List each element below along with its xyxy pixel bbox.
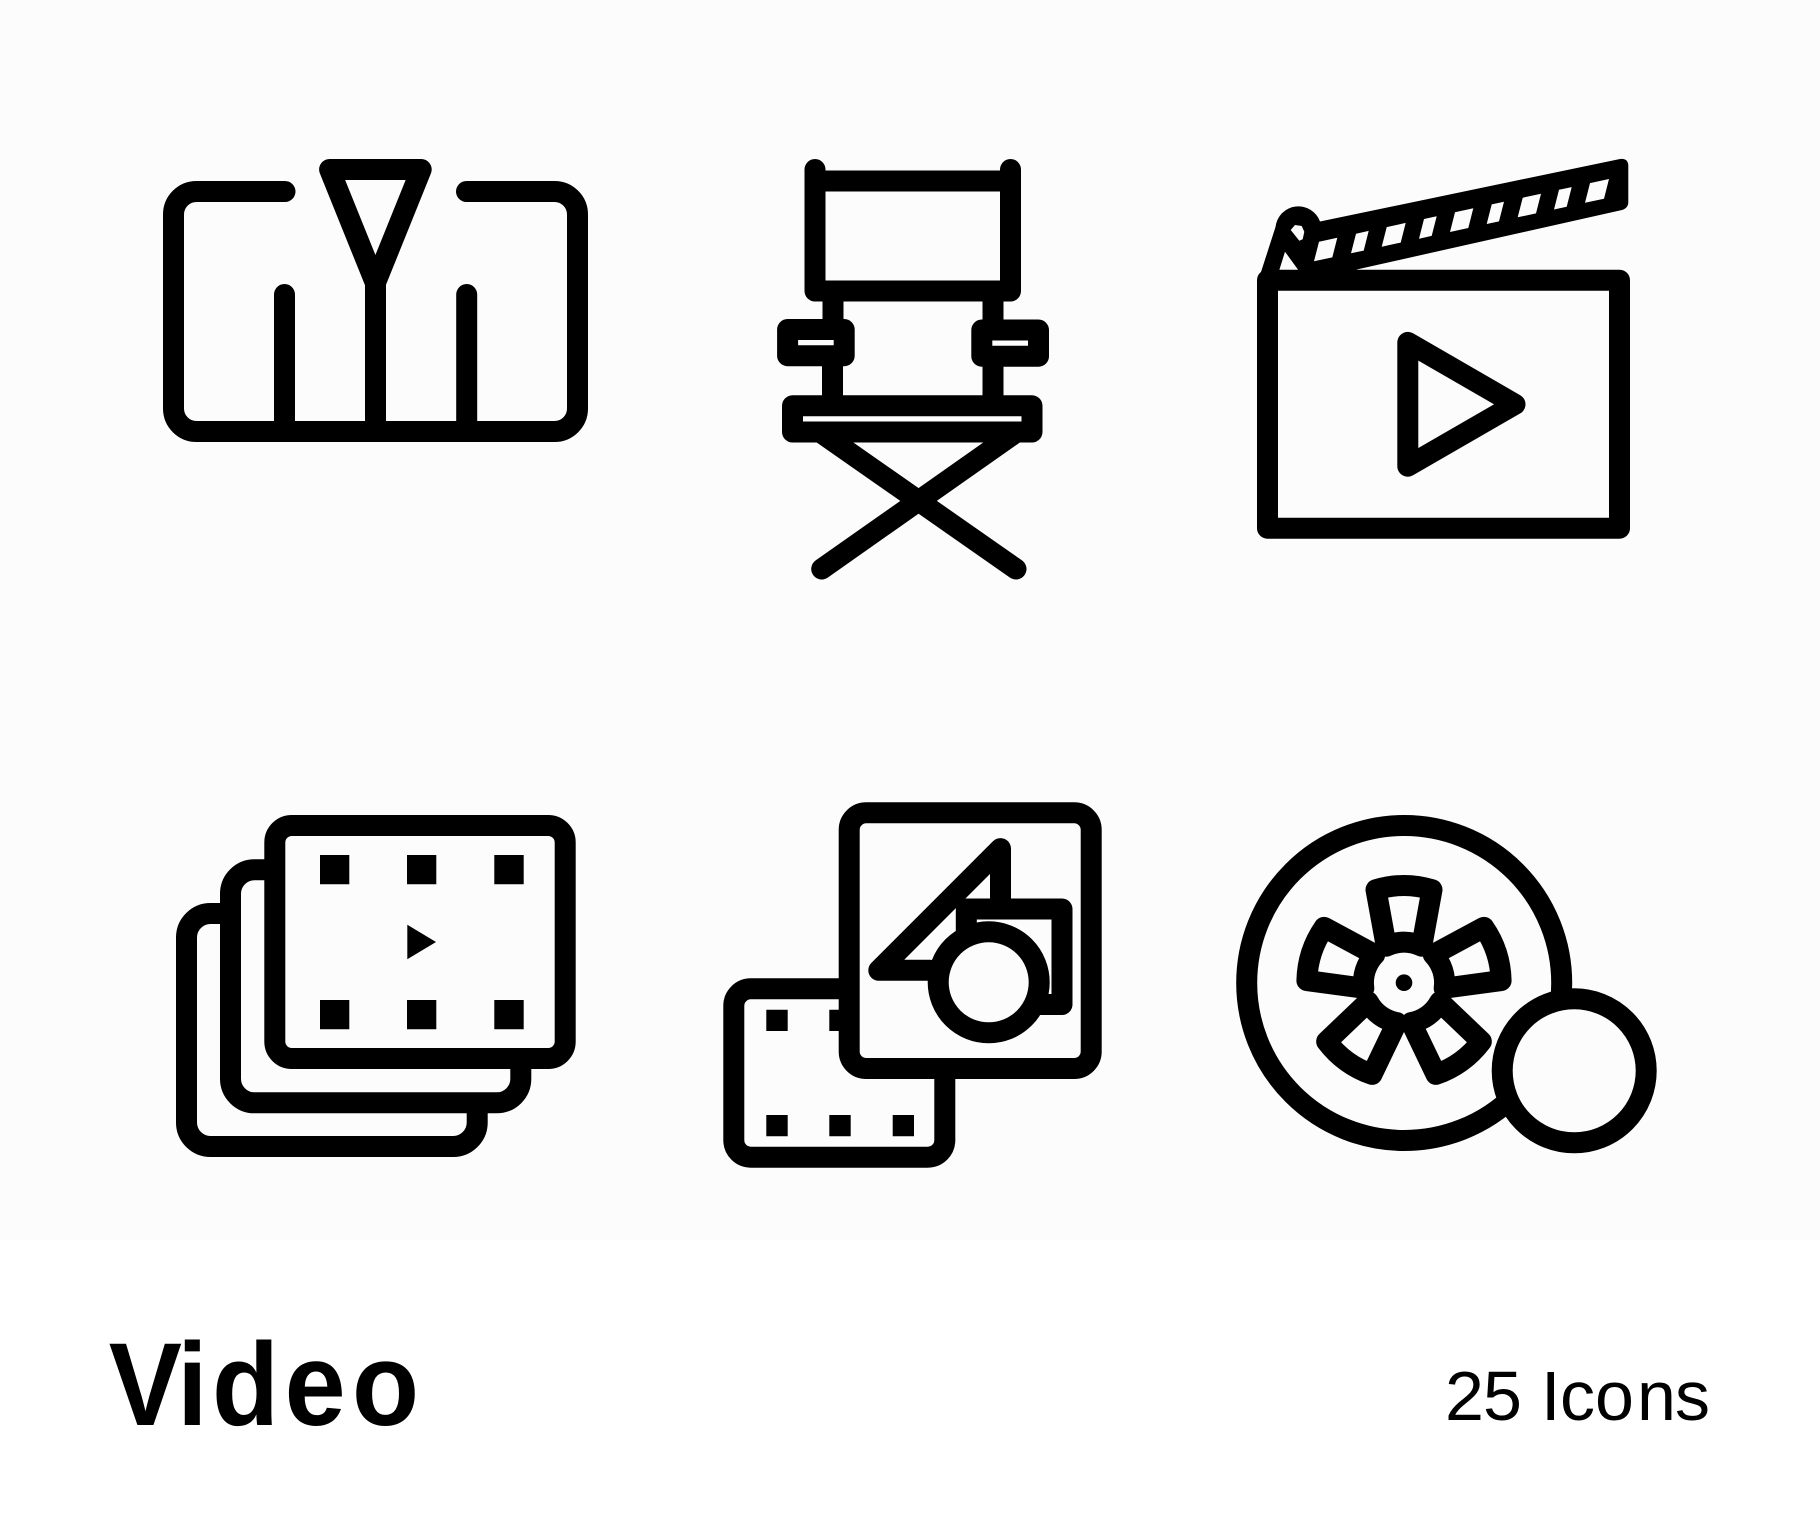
icon: clapperboard with play button <box>1261 159 1628 528</box>
title: Video <box>109 1319 419 1451</box>
icon: director chair <box>788 170 1038 569</box>
icon: antenna in frame <box>174 170 578 432</box>
reel blades <box>1303 886 1505 1078</box>
icon: film reel with circle <box>1247 826 1646 1143</box>
icon count: 25 Icons <box>0 1357 1710 1435</box>
clapper stick <box>1261 159 1628 285</box>
icon: film strip with camera <box>734 813 1091 1157</box>
icon: stacked film frames <box>186 826 565 1146</box>
